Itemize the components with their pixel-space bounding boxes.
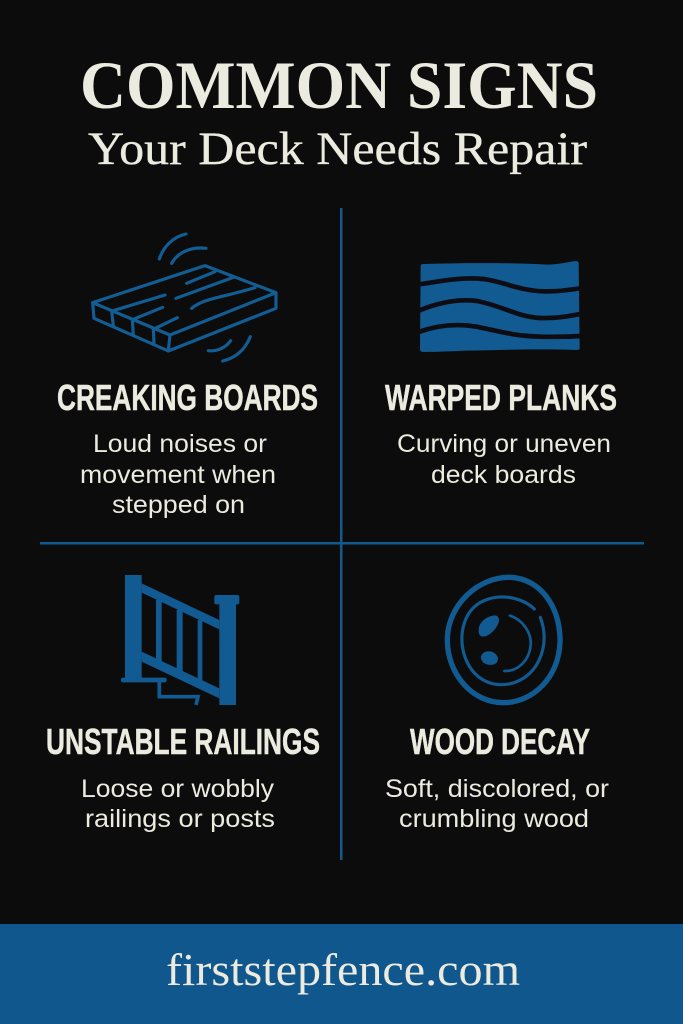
text: creaking boards description — [80, 430, 276, 519]
panel: creaking boards — [57, 234, 318, 519]
icon: railing — [121, 575, 239, 705]
text: unstable railings description: Loose or wobbly — [81, 775, 275, 803]
heading: creaking boards: CREAKING BOARDS — [57, 377, 318, 418]
text: warped planks description: Curving or uneven — [397, 430, 611, 458]
text: creaking boards description: movement when — [80, 461, 276, 489]
panel: warped planks — [385, 261, 617, 489]
text: warped planks description: deck boards — [431, 461, 576, 489]
icon: creaking deck board — [93, 234, 276, 361]
text: creaking boards description: Loud noises or — [93, 430, 267, 458]
text: wood decay description: crumbling wood — [399, 805, 589, 833]
panel: unstable railings — [46, 575, 320, 833]
heading: unstable railings: UNSTABLE RAILINGS — [46, 721, 320, 762]
footer banner — [0, 924, 683, 1024]
text: wood decay description — [385, 775, 609, 833]
text: unstable railings description — [81, 775, 275, 833]
title: Your Deck Needs Repair — [88, 123, 587, 175]
text: unstable railings description: railings or posts — [85, 805, 275, 833]
icon: warped planks — [419, 261, 582, 352]
title: COMMON SIGNS — [80, 47, 598, 123]
title — [80, 47, 598, 175]
text: creaking boards description: stepped on — [112, 491, 245, 519]
text: wood decay description: Soft, discolored, or — [385, 775, 609, 803]
text: warped planks description — [397, 430, 611, 489]
heading: wood decay: WOOD DECAY — [410, 721, 590, 762]
icon: wood decay rings — [447, 577, 560, 703]
footer banner: firststepfence.com — [166, 944, 520, 995]
panel: wood decay — [385, 577, 609, 833]
